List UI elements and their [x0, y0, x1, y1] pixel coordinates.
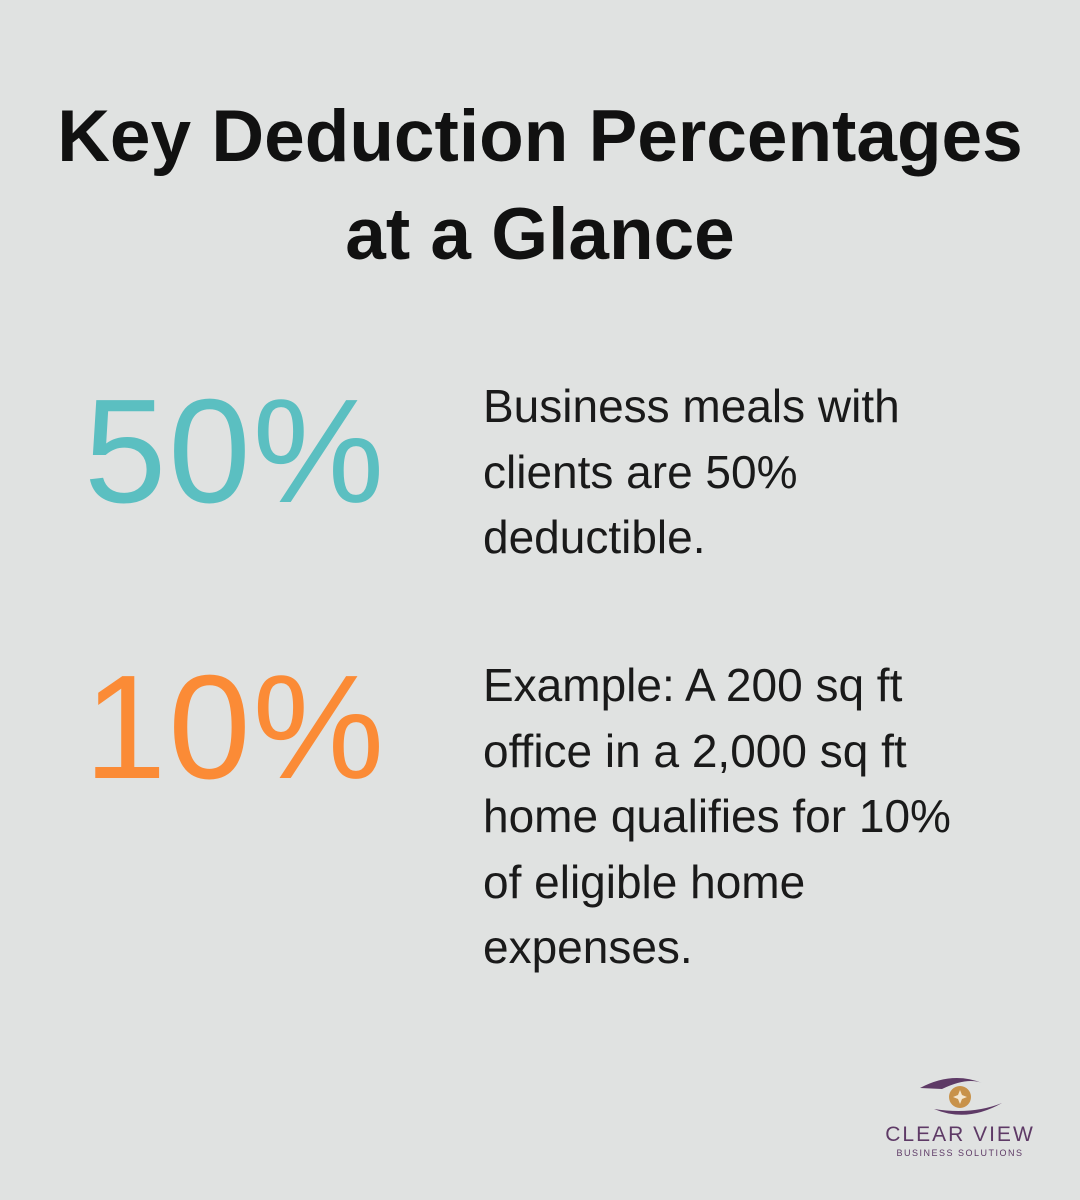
text: business meals: deductible. [483, 511, 706, 563]
stat: 10%: 10% [84, 645, 386, 810]
text: home office [483, 659, 951, 973]
title: Key Deduction Percentages [57, 96, 1023, 177]
stat: 50%: 50% [84, 369, 386, 534]
text: business meals: Business meals with [483, 380, 900, 432]
text: home office: of eligible home [483, 856, 805, 908]
text: home office: Example: A 200 sq ft [483, 659, 902, 711]
logo text: CLEAR VIEW [885, 1123, 1035, 1146]
logo [885, 1078, 1035, 1158]
text: business meals [483, 380, 900, 563]
text: home office: expenses. [483, 921, 693, 973]
text: home office: office in a 2,000 sq ft [483, 724, 907, 776]
title [57, 96, 1023, 275]
text: business meals: clients are 50% [483, 446, 798, 498]
logo text [885, 1123, 1035, 1158]
title: at a Glance [345, 194, 735, 275]
icon: eye [920, 1078, 1002, 1115]
logo text: BUSINESS SOLUTIONS [896, 1148, 1024, 1158]
text: home office: home qualifies for 10% [483, 790, 951, 842]
